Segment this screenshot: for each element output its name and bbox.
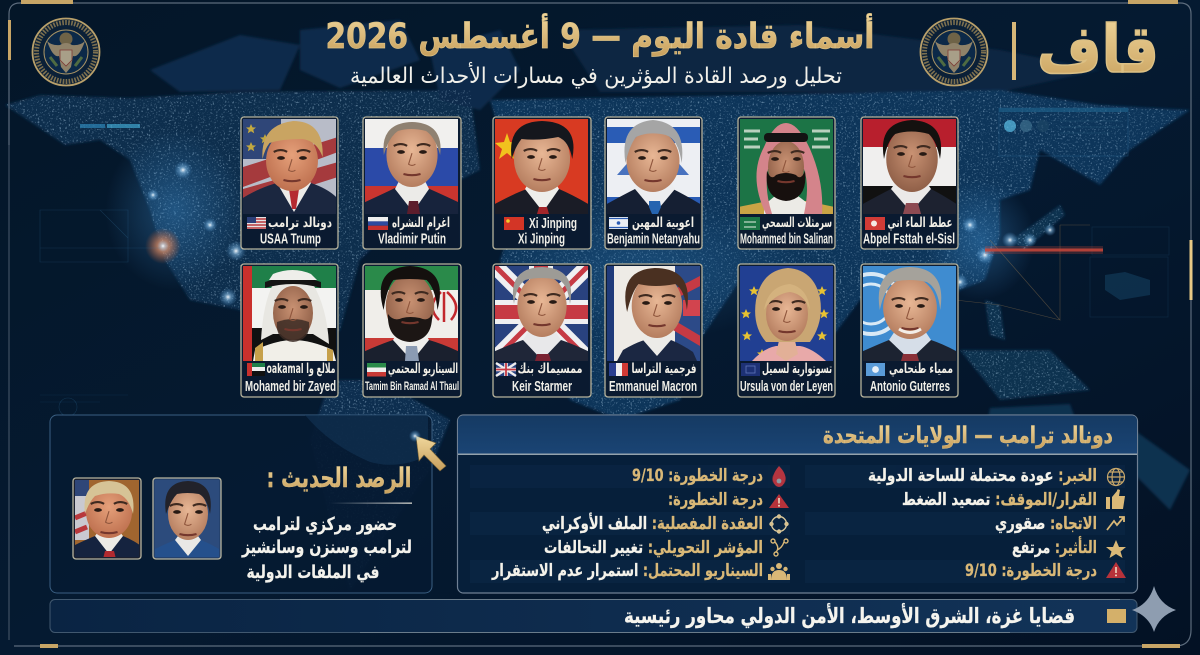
icon: flame xyxy=(772,466,786,487)
card: Xi xyxy=(493,117,591,249)
card: MBZ: ملالع وا oakamal xyxy=(266,361,336,377)
icon: warning xyxy=(769,494,789,508)
row: scenario: السيناريو المحتمل: استمرار عدم الاستقرار xyxy=(491,561,763,581)
card: Tamim: السيناريو المحتمي xyxy=(388,361,458,377)
card: Trump: USAA Trump xyxy=(260,232,321,248)
row: knot: العقدة المفصلية: الملف الأوكراني xyxy=(542,513,763,534)
card: MBZ: Mohamed bir Zayed xyxy=(245,379,336,395)
row: news: الخبر: عودة محتملة للساحة الدولية xyxy=(868,466,1097,486)
card: Trump: دونالد ترامب xyxy=(268,215,332,231)
red route line xyxy=(985,246,1103,254)
flag: EU xyxy=(741,363,760,376)
row: danger: درجة الخطورة: xyxy=(668,490,763,510)
text block: في الملفات الدولية xyxy=(246,562,380,583)
card: MBS: Mohammed bin Salinan xyxy=(740,232,833,248)
card: Sisi xyxy=(861,117,958,249)
row bands xyxy=(470,465,1125,583)
flag: UK xyxy=(496,363,516,376)
icon: gold square xyxy=(1107,609,1126,623)
icon: star xyxy=(1106,540,1126,558)
flag: UAE xyxy=(247,363,265,376)
flag: Israel xyxy=(609,217,628,229)
card: Starmer xyxy=(493,264,591,397)
arrow: gold pointer xyxy=(416,436,446,471)
icon: thumbs up xyxy=(1106,489,1125,509)
icon: people xyxy=(768,563,790,580)
card: Xi: Xi Jinping xyxy=(529,216,577,232)
details column right xyxy=(868,466,1126,581)
card: Sisi: Abpel Fsttah el-Sisl xyxy=(863,232,955,248)
flag: France xyxy=(609,363,628,376)
flag: USA xyxy=(247,217,266,229)
card: Macron xyxy=(605,264,702,397)
banner text: قضايا غزة، الشرق الأوسط، الأمن الدولي محاور رئيسية xyxy=(624,602,1075,628)
title: أسماء قادة اليوم — 9 أغسطس 2026 xyxy=(326,13,874,57)
card: Tamim xyxy=(363,264,461,397)
flag: China xyxy=(504,217,524,230)
HUD overlays xyxy=(40,108,1169,416)
flag: Egypt xyxy=(865,217,885,230)
subtitle: تحليل ورصد القادة المؤثرين في مسارات الأحداث العالمية xyxy=(350,62,842,89)
icon: right seal xyxy=(920,18,988,86)
portrait: Sánchez xyxy=(153,478,221,559)
card: Macron: Emmanuel Macron xyxy=(609,379,697,395)
panel header xyxy=(458,416,1137,454)
card: Putin: Vladimir Putin xyxy=(378,232,446,248)
portrait: Trump xyxy=(73,478,141,559)
row: indicator: المؤشر التحويلي: تغيير التحالفات xyxy=(544,538,763,558)
card: Macron: فرجمية التراسا xyxy=(632,361,696,377)
text block: لترامب وسنزن وسانشيز xyxy=(241,537,412,558)
row: danger: درجة الخطورة: 9/10 xyxy=(965,561,1097,581)
card: Xi: Xi Jinping xyxy=(518,232,565,248)
card: Starmer: Keir Starmer xyxy=(512,379,572,395)
card: Guterres: ممياء طنحامي xyxy=(889,361,953,377)
card: Sisi: عطط الماء اني xyxy=(888,215,952,231)
card: MBZ xyxy=(241,264,338,397)
card: Guterres: Antonio Guterres xyxy=(870,379,950,395)
panel: recent monitoring xyxy=(50,415,446,593)
panel: leader details xyxy=(458,415,1138,593)
card: von der Leyen: تسوتوارية لسميل xyxy=(762,361,832,377)
icon: warning xyxy=(1106,562,1126,578)
row: danger score: درجة الخطورة: 9/10 xyxy=(632,466,763,486)
card: Putin: اغرام النشراه xyxy=(392,215,450,231)
text block xyxy=(241,514,412,583)
card: Guterres xyxy=(860,263,959,398)
icon: left seal xyxy=(32,18,100,86)
card: von der Leyen xyxy=(738,264,835,397)
row: decision: القرار/الموقف: تصعيد الضغط xyxy=(902,490,1097,510)
text block: حضور مركزي لترامب xyxy=(253,514,397,535)
card: MBS: سرمثلات السمحي xyxy=(762,215,832,231)
card: Trump xyxy=(241,117,338,249)
heading: الرصد الحديث : xyxy=(266,463,412,494)
flag: Russia xyxy=(368,217,388,230)
flag: Iran xyxy=(367,363,386,376)
flag: UN xyxy=(866,363,885,376)
logo: قاف: قاف xyxy=(1037,11,1159,88)
panel: bottom banner xyxy=(50,600,1137,632)
card: von der Leyen: Ursula von der Leyen xyxy=(740,379,833,395)
card: Netanyahu: اعوبية المهين xyxy=(632,215,694,231)
icon: globe xyxy=(1108,468,1124,486)
card: Putin xyxy=(363,117,461,249)
icon: ring xyxy=(770,515,788,533)
row: direction: الاتجاه: صقوري xyxy=(995,514,1097,534)
card: Tamim: Tamim Bin Ramad Al Thaul xyxy=(365,379,459,393)
card: MBS xyxy=(738,117,835,249)
icon: trend xyxy=(1107,517,1124,530)
details column left xyxy=(491,466,790,581)
heading: دونالد ترامب — الولايات المتحدة xyxy=(823,423,1113,449)
map highlight xyxy=(305,415,428,465)
icon: sparkle star xyxy=(1132,586,1176,632)
card: Netanyahu xyxy=(605,117,702,249)
icon: branches xyxy=(771,539,788,556)
row: impact: التأثير: مرتفع xyxy=(1012,536,1097,558)
card: Netanyahu: Benjamin Netanyahu xyxy=(607,232,700,248)
flag: Saudi Arabia xyxy=(740,217,760,230)
card: Starmer: ممسيماك بنك xyxy=(518,361,582,377)
